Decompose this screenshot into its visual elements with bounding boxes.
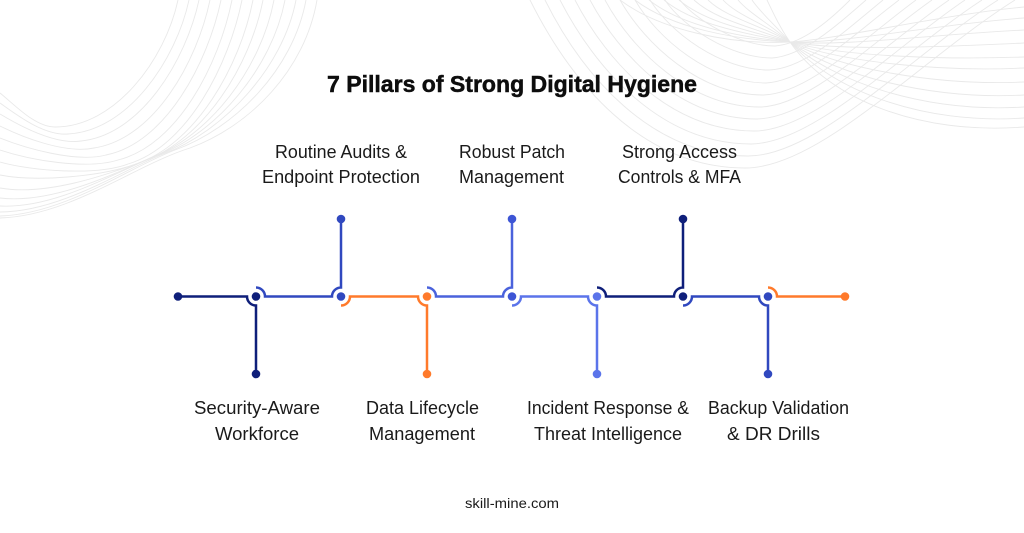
pillar 6 connector: navy [597, 215, 687, 301]
label: Data Lifecycle Management: Data Lifecycle [366, 398, 479, 418]
label: Incident Response & Threat Intelligence [527, 398, 689, 444]
pillar 3 connector: orange [341, 292, 431, 378]
background wave: top right [530, 0, 1024, 168]
label: Backup Validation & DR Drills: Backup Validation [708, 398, 849, 418]
pillar 4 connector: medium blue [427, 215, 516, 301]
label: Routine Audits & Endpoint Protection [262, 142, 420, 187]
pillar 5 connector: light blue [512, 292, 601, 378]
footer website: skill-mine.com [465, 495, 559, 511]
label: Robust Patch Management [459, 142, 565, 187]
label: Strong Access Controls & MFA: Controls & MFA [618, 167, 741, 187]
title: 7 Pillars of Strong Digital Hygiene [327, 71, 697, 97]
pillar 7 connector: blue [683, 292, 772, 378]
end connector: orange [768, 288, 849, 301]
label: Security-Aware Workforce: Security-Aware [194, 398, 320, 418]
label: Routine Audits & Endpoint Protection: Endpoint Protection [262, 167, 420, 187]
label: Security-Aware Workforce [194, 398, 320, 444]
background wave: top left [0, 0, 317, 218]
label: Backup Validation & DR Drills: & DR Drills [727, 424, 820, 444]
pillar 2 connector: blue [256, 215, 345, 301]
label: Robust Patch Management: Management [459, 167, 564, 187]
timeline diagram [174, 215, 849, 378]
label: Routine Audits & Endpoint Protection: Routine Audits & [275, 142, 407, 162]
pillar 1 connector: navy [174, 292, 260, 378]
label: Incident Response & Threat Intelligence: Threat Intelligence [534, 424, 682, 444]
label: Strong Access Controls & MFA [618, 142, 741, 187]
label: Robust Patch Management: Robust Patch [459, 142, 565, 162]
label: Incident Response & Threat Intelligence: Incident Response & [527, 398, 689, 418]
label: Security-Aware Workforce: Workforce [215, 424, 299, 444]
label: Data Lifecycle Management [366, 398, 479, 444]
label: Data Lifecycle Management: Management [369, 424, 475, 444]
label: Strong Access Controls & MFA: Strong Access [622, 142, 737, 162]
label: Backup Validation & DR Drills [708, 398, 849, 444]
